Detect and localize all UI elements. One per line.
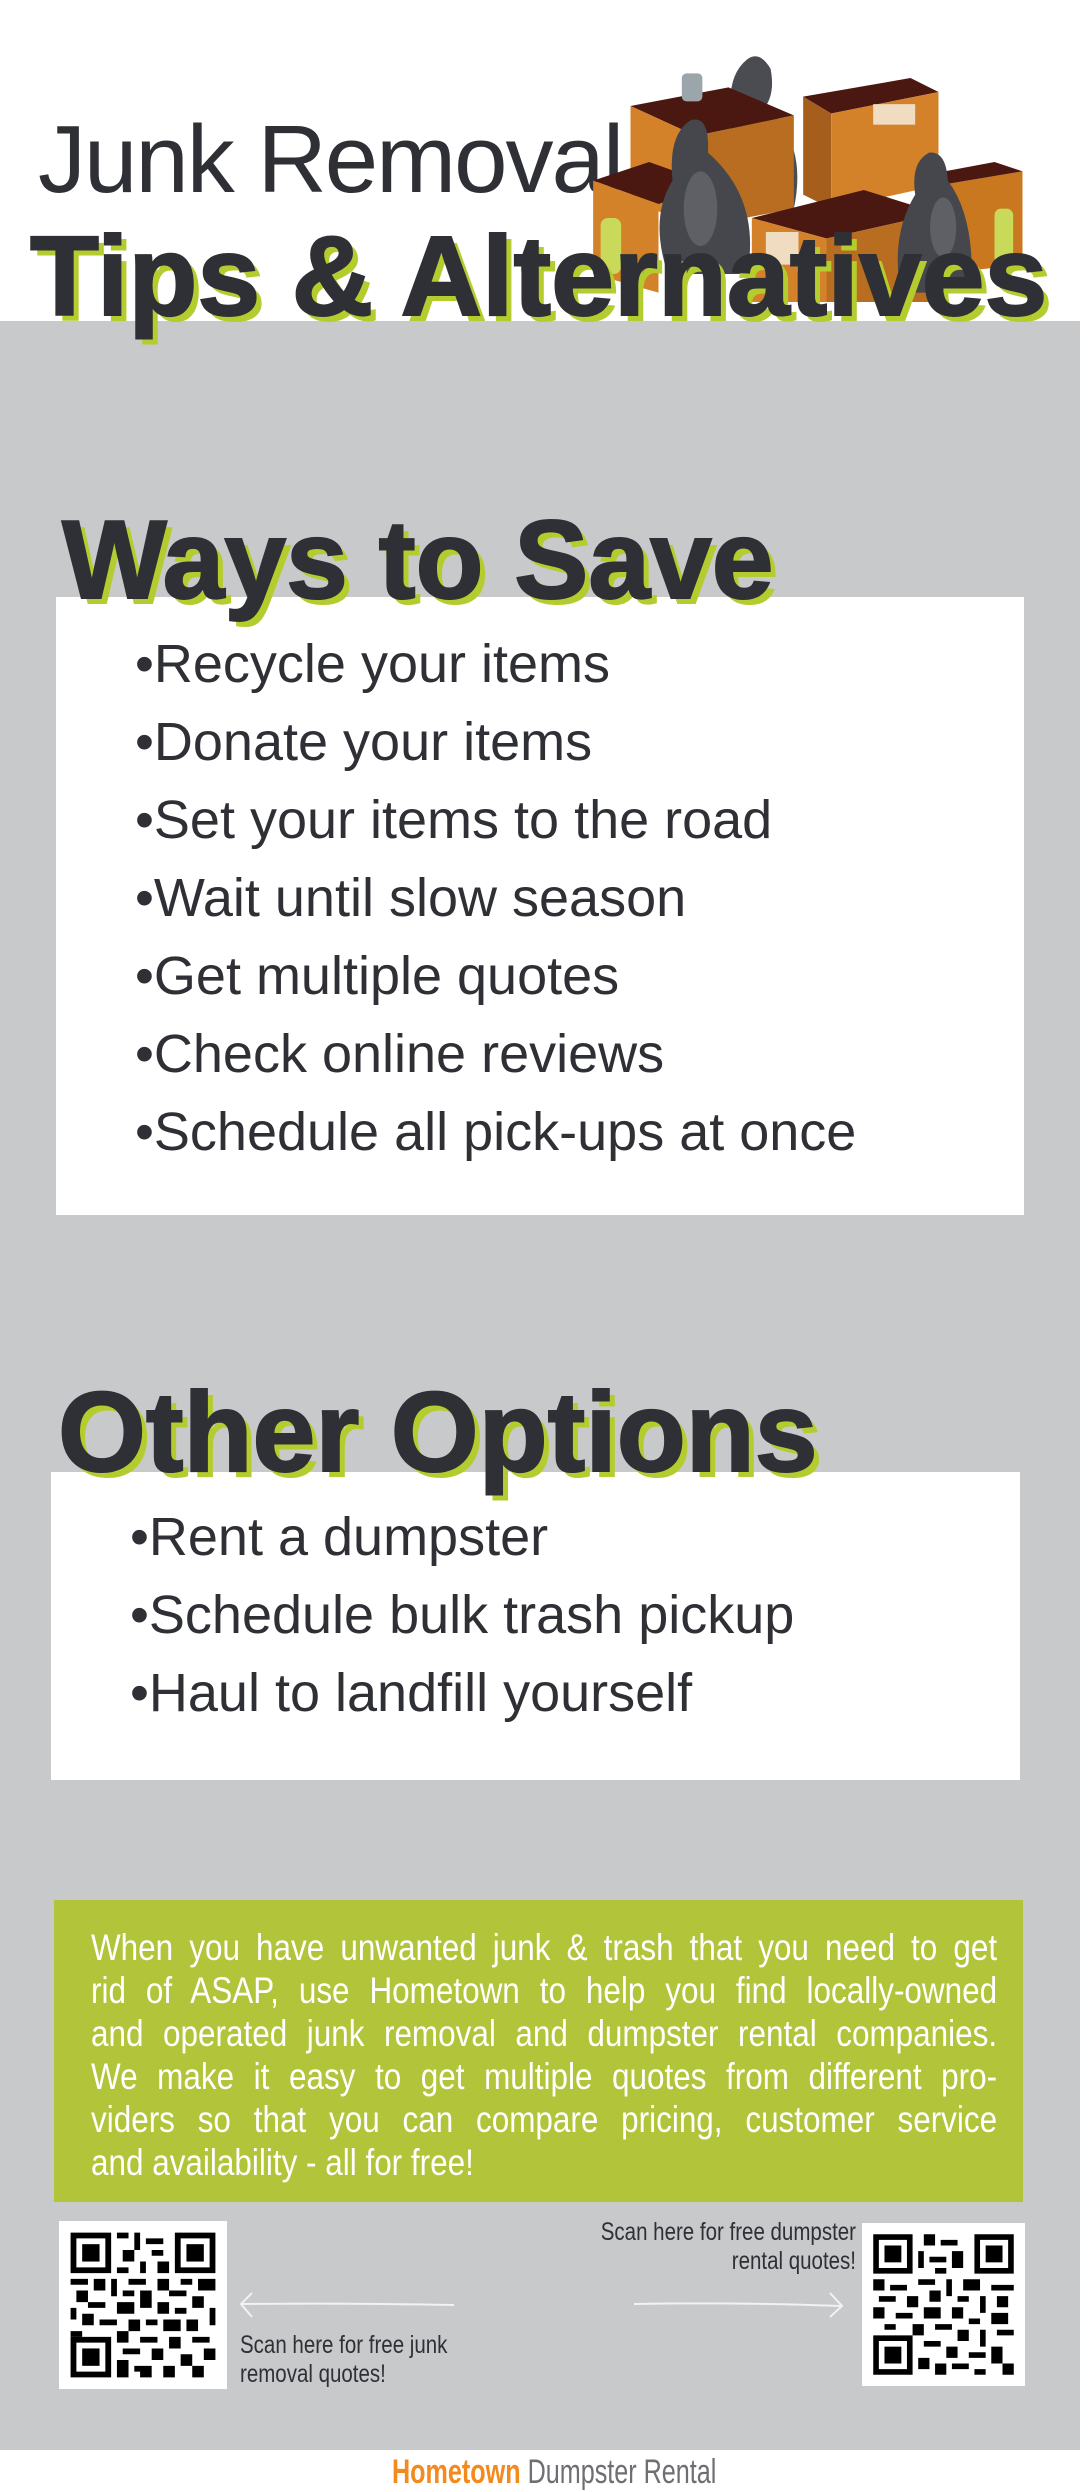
text: scan dumpster: [601, 2218, 856, 2275]
list: other options: •Rent a dumpster: [130, 1507, 548, 1567]
list: ways to save: •Recycle your items: [135, 634, 610, 694]
text: scan junk removal: [240, 2331, 448, 2388]
list: other options: •Schedule bulk trash pickup: [130, 1585, 794, 1645]
callout: green info box: We make it easy to get multiple quotes from different pro-: [91, 2056, 997, 2097]
list: other options: •Haul to landfill yourself: [130, 1663, 692, 1723]
list: ways to save: •Schedule all pick-ups at once: [135, 1102, 856, 1162]
list: ways to save: •Set your items to the road: [135, 790, 772, 850]
heading: Ways to Save: Ways to Save: [62, 498, 774, 622]
footer logo: Hometown Dumpster Rental: [392, 2453, 716, 2491]
callout: green info box: [54, 1900, 1023, 2202]
callout: green info box: When you have unwanted junk & trash that you need to get: [91, 1927, 997, 1968]
callout: green info box: and operated junk removal and dumpster rental companies.: [91, 2013, 997, 2054]
heading: Other Options: Other Options: [58, 1369, 818, 1495]
text: scan dumpster: rental quotes!: [732, 2247, 856, 2275]
panel: ways to save: [56, 597, 1024, 1215]
QR code left: [59, 2221, 227, 2389]
list: ways to save: •Donate your items: [135, 712, 592, 772]
text: scan dumpster: Scan here for free dumpster: [601, 2218, 856, 2246]
panel: other options: [51, 1472, 1020, 1780]
text: scan junk removal: Scan here for free junk: [240, 2331, 447, 2359]
arrow left: [240, 2292, 454, 2318]
list: ways to save: •Get multiple quotes: [135, 946, 619, 1006]
list: ways to save: •Wait until slow season: [135, 868, 686, 928]
title: Tips & Alternatives: Tips & Alternatives: [30, 213, 1047, 339]
illustration: junk pile: [593, 56, 1022, 302]
text: scan junk removal: removal quotes!: [240, 2360, 386, 2388]
QR code right: [862, 2223, 1025, 2386]
list: ways to save: •Check online reviews: [135, 1024, 664, 1084]
callout: green info box: and availability - all for free!: [91, 2142, 474, 2183]
arrow right: [634, 2292, 844, 2318]
callout: green info box: rid of ASAP, use Hometown to help you find locally-owned: [91, 1970, 997, 2011]
list: other options: [130, 1507, 794, 1723]
title: Junk Removal: Junk Removal: [38, 106, 622, 213]
list: ways to save: [135, 634, 856, 1162]
callout: green info box: viders so that you can compare pricing, customer service: [91, 2099, 997, 2140]
